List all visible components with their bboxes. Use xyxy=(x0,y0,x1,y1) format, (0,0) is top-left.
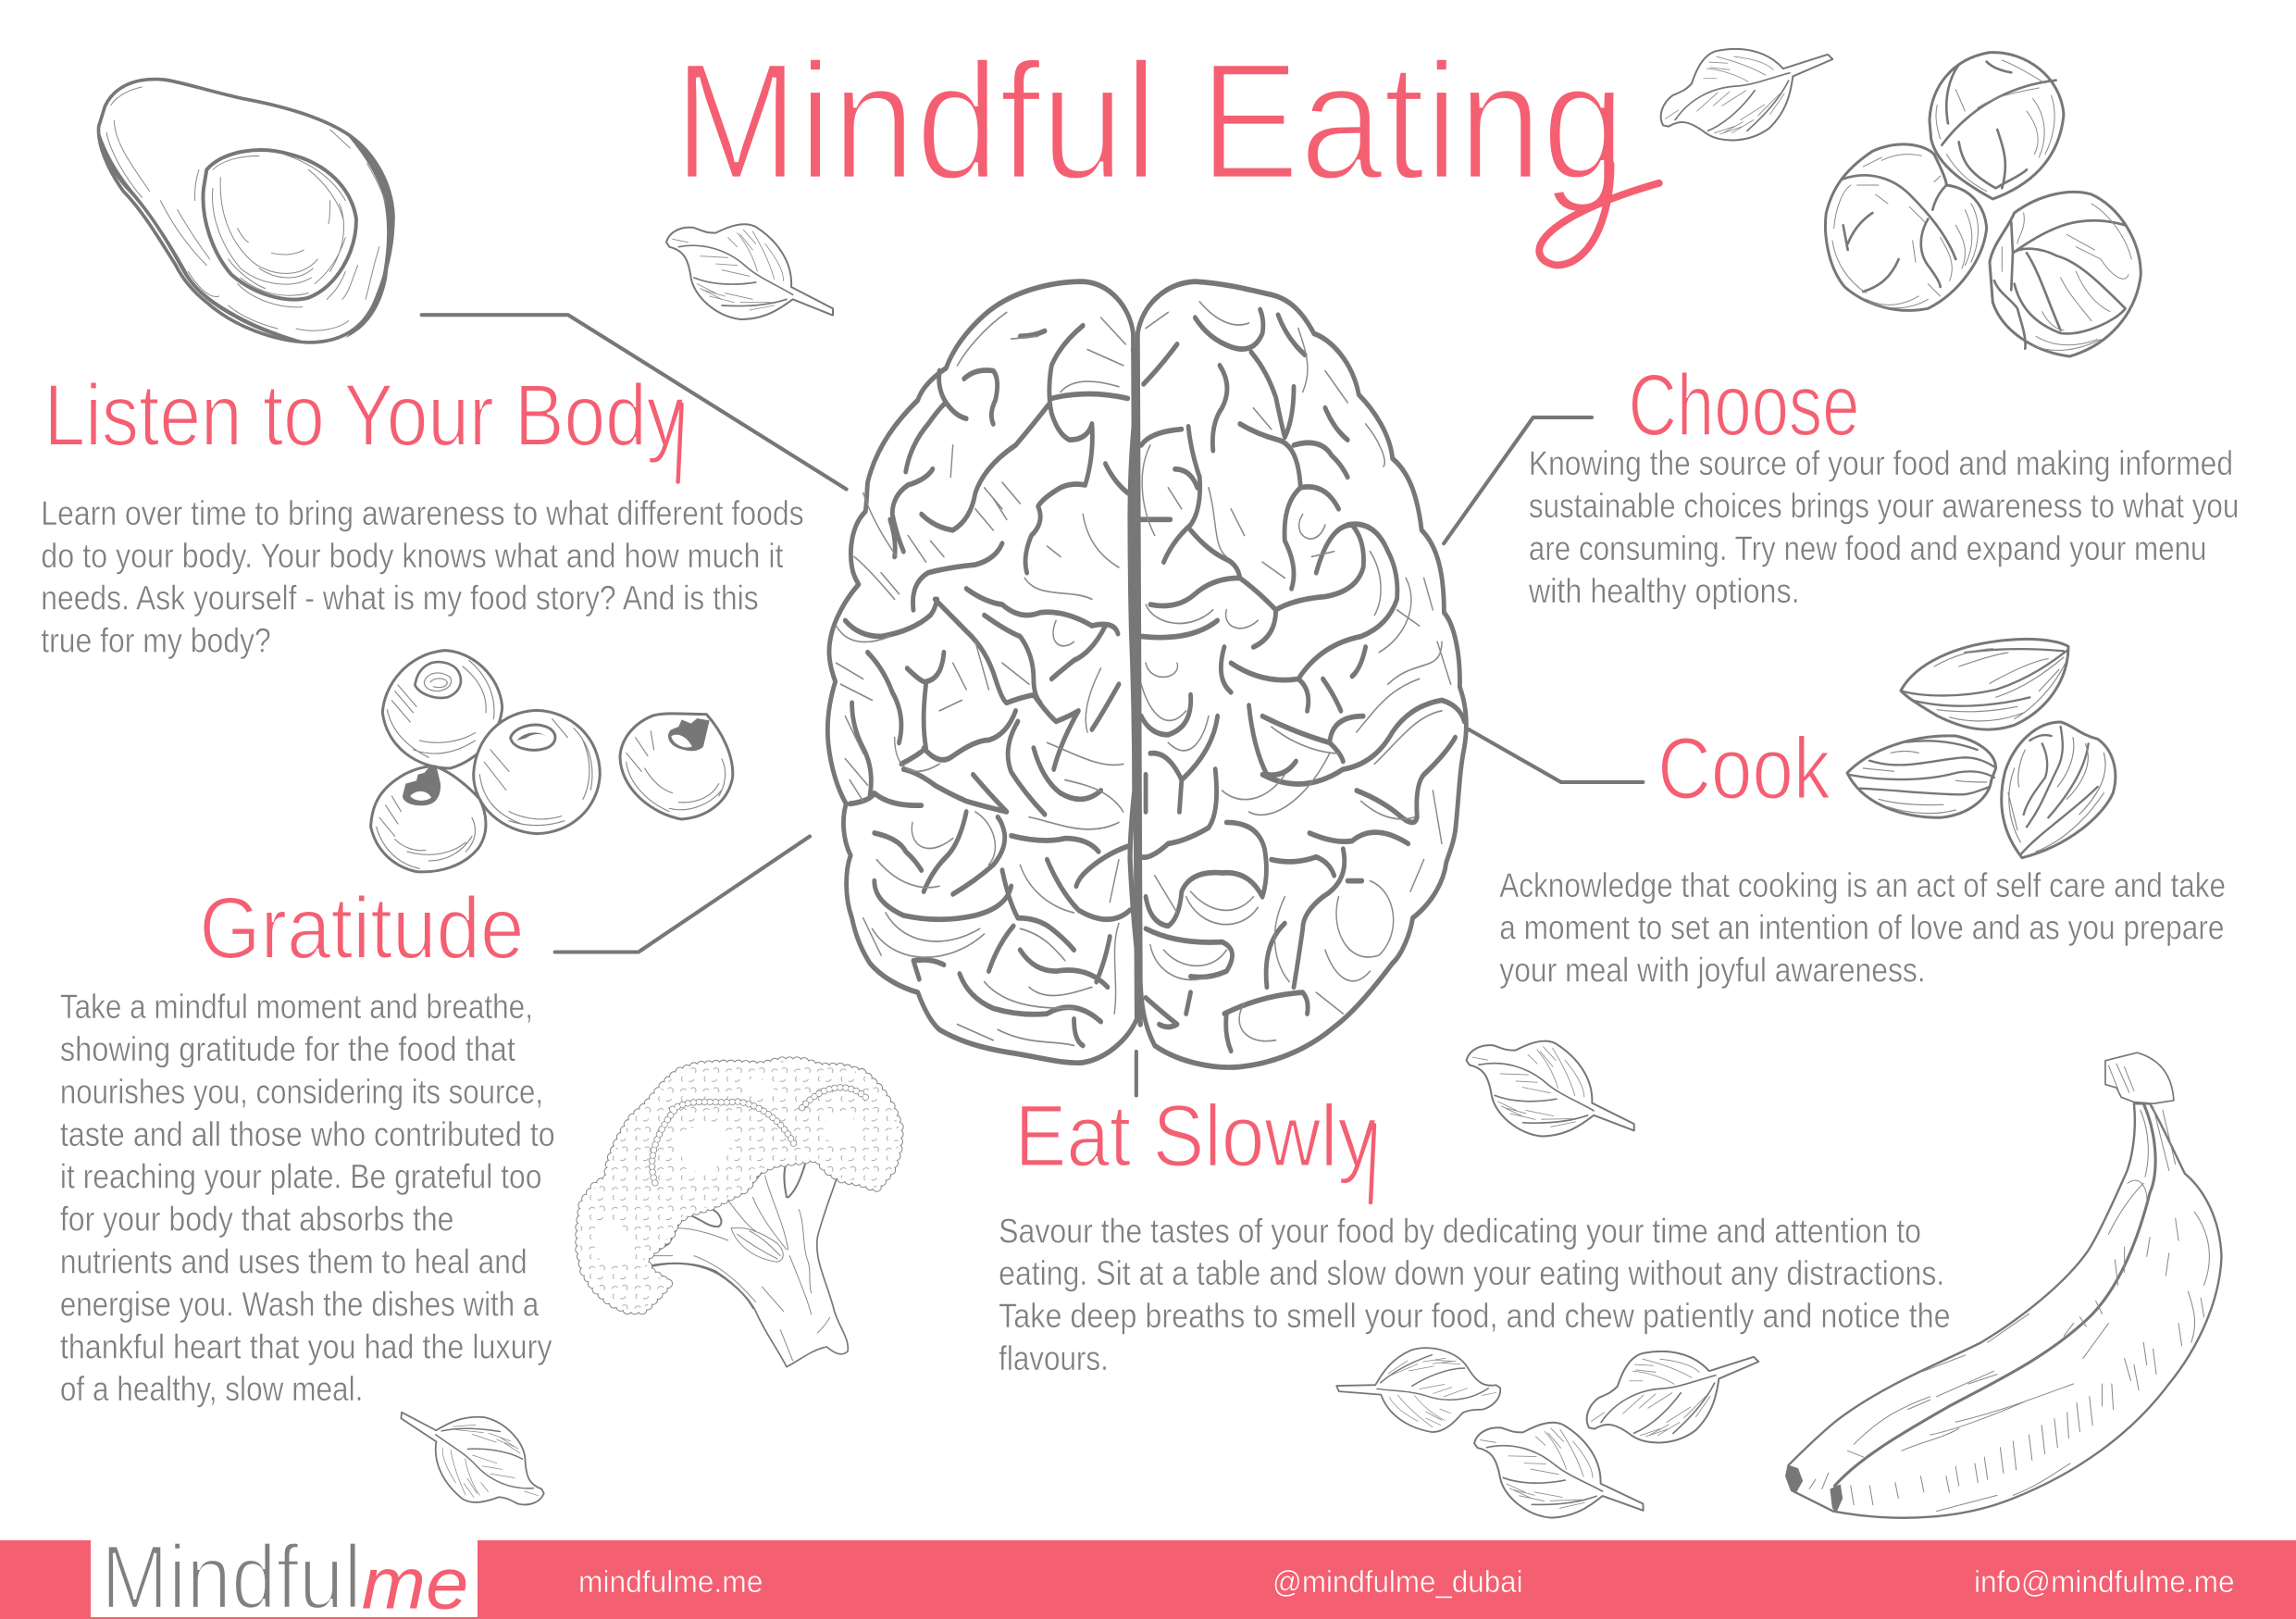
illustration: broccoli xyxy=(580,1062,900,1367)
heading y tail xyxy=(678,405,682,482)
sprout left xyxy=(1825,144,1987,310)
title: Mindful Eating xyxy=(674,29,1625,215)
text: gratitude: thankful heart that you had the luxury xyxy=(60,1326,552,1365)
sprout top xyxy=(1930,53,2064,199)
text: gratitude: for your body that absorbs the xyxy=(60,1200,454,1239)
connector: gratitude xyxy=(555,836,810,952)
text: gratitude: nutrients and uses them to heal and xyxy=(60,1241,527,1280)
text: eat slowly: flavours. xyxy=(999,1339,1109,1377)
footer: social handle: @mindfulme_dubai xyxy=(1272,1565,1523,1600)
connector: choose xyxy=(1444,417,1592,543)
banana hatching xyxy=(1809,1064,2209,1512)
text: cook: your meal with joyful awareness. xyxy=(1499,951,1926,990)
berry right xyxy=(620,714,733,819)
brain sulci right xyxy=(1141,310,1464,1051)
banana stem xyxy=(2105,1052,2174,1103)
heading: gratitude: Gratitude xyxy=(199,879,524,978)
berry middle xyxy=(474,710,600,834)
connector: eat slowly xyxy=(1136,1052,1137,1096)
footer: website: mindfulme.me xyxy=(578,1565,763,1600)
text: gratitude: of a healthy, slow meal. xyxy=(60,1369,363,1408)
illustration: leaf bottom left xyxy=(393,1409,552,1510)
brain left hemisphere outline xyxy=(827,281,1136,1063)
berry bottom xyxy=(371,766,486,872)
banana body xyxy=(1786,1103,2222,1518)
almond right xyxy=(2002,722,2116,858)
illustration: leaf above banana xyxy=(1466,1040,1634,1138)
illustration: blueberries xyxy=(371,651,733,872)
broccoli floret crown xyxy=(580,1062,900,1310)
illustration: leaf bottom centre left xyxy=(1335,1324,1507,1462)
text: gratitude: showing gratitude for the food that xyxy=(60,1029,516,1068)
illustration: brain xyxy=(827,281,1466,1067)
brain central fissure xyxy=(1130,350,1140,1025)
text: choose xyxy=(1528,443,2239,610)
logo box xyxy=(91,1518,478,1617)
illustration: brussels sprouts xyxy=(1825,53,2141,356)
broccoli stem xyxy=(645,1157,848,1367)
text: eat slowly: Take deep breaths to smell your food, and chew patiently and notice the xyxy=(999,1296,1951,1335)
text: gratitude xyxy=(60,987,555,1408)
text: listen to your body: Learn over time to bring awareness to what different foods xyxy=(41,493,804,532)
illustration: banana xyxy=(1785,1052,2222,1518)
brain sulci left xyxy=(845,326,1130,1046)
sprout right xyxy=(1990,192,2141,356)
text: gratitude: taste and all those who contributed to xyxy=(60,1115,555,1153)
text: listen to your body: true for my body? xyxy=(41,621,271,660)
text: choose: with healthy options. xyxy=(1528,571,1800,610)
heading: choose: Choose xyxy=(1629,356,1860,455)
illustration: almonds xyxy=(1847,639,2116,858)
text: eat slowly xyxy=(999,1211,1951,1377)
text: listen to your body: needs. Ask yourself - what is my food story? And is this xyxy=(41,579,759,617)
heading: eat slowly: Eat Slowly xyxy=(1015,1088,1377,1186)
text: eat slowly: Savour the tastes of your food by dedicating your time and attention to xyxy=(999,1211,1921,1250)
illustration: leaf bottom centre right xyxy=(1576,1297,1761,1482)
illustration: leaf near avocado xyxy=(666,224,833,319)
banana tips xyxy=(1785,1465,1843,1513)
footer band xyxy=(0,1540,2296,1619)
connector: listen to your body xyxy=(422,315,847,489)
text: listen to your body xyxy=(41,493,804,660)
heading y tail xyxy=(1371,1125,1374,1202)
brain right hemisphere outline xyxy=(1137,281,1466,1067)
berry top xyxy=(382,651,503,768)
almond top xyxy=(1901,639,2068,729)
text: gratitude: it reaching your plate. Be grateful too xyxy=(60,1157,541,1196)
text: gratitude: energise you. Wash the dishes with a xyxy=(60,1284,540,1323)
banana divider xyxy=(1835,1103,2155,1486)
connector: cook xyxy=(1469,729,1643,782)
text: listen to your body: do to your body. Your body knows what and how much it xyxy=(41,536,784,575)
title letter g tail xyxy=(1539,164,1659,265)
footer: email: info@mindfulme.me xyxy=(1974,1565,2235,1600)
text: gratitude: Take a mindful moment and breathe, xyxy=(60,987,533,1026)
text: gratitude: nourishes you, considering its source, xyxy=(60,1072,543,1111)
text: cook xyxy=(1499,866,2226,990)
illustration: avocado xyxy=(99,80,394,343)
brain fine hatching xyxy=(837,302,1451,1046)
heading: cook: Cook xyxy=(1657,719,1831,817)
heading: listen to your body: Listen to Your Body xyxy=(43,367,684,465)
text: eat slowly: eating. Sit at a table and slow down your eating without any distractions. xyxy=(999,1253,1944,1292)
almond left xyxy=(1847,736,1996,817)
illustration: leaf top right xyxy=(1650,0,1835,180)
illustration: leaf bottom centre low xyxy=(1473,1419,1644,1520)
